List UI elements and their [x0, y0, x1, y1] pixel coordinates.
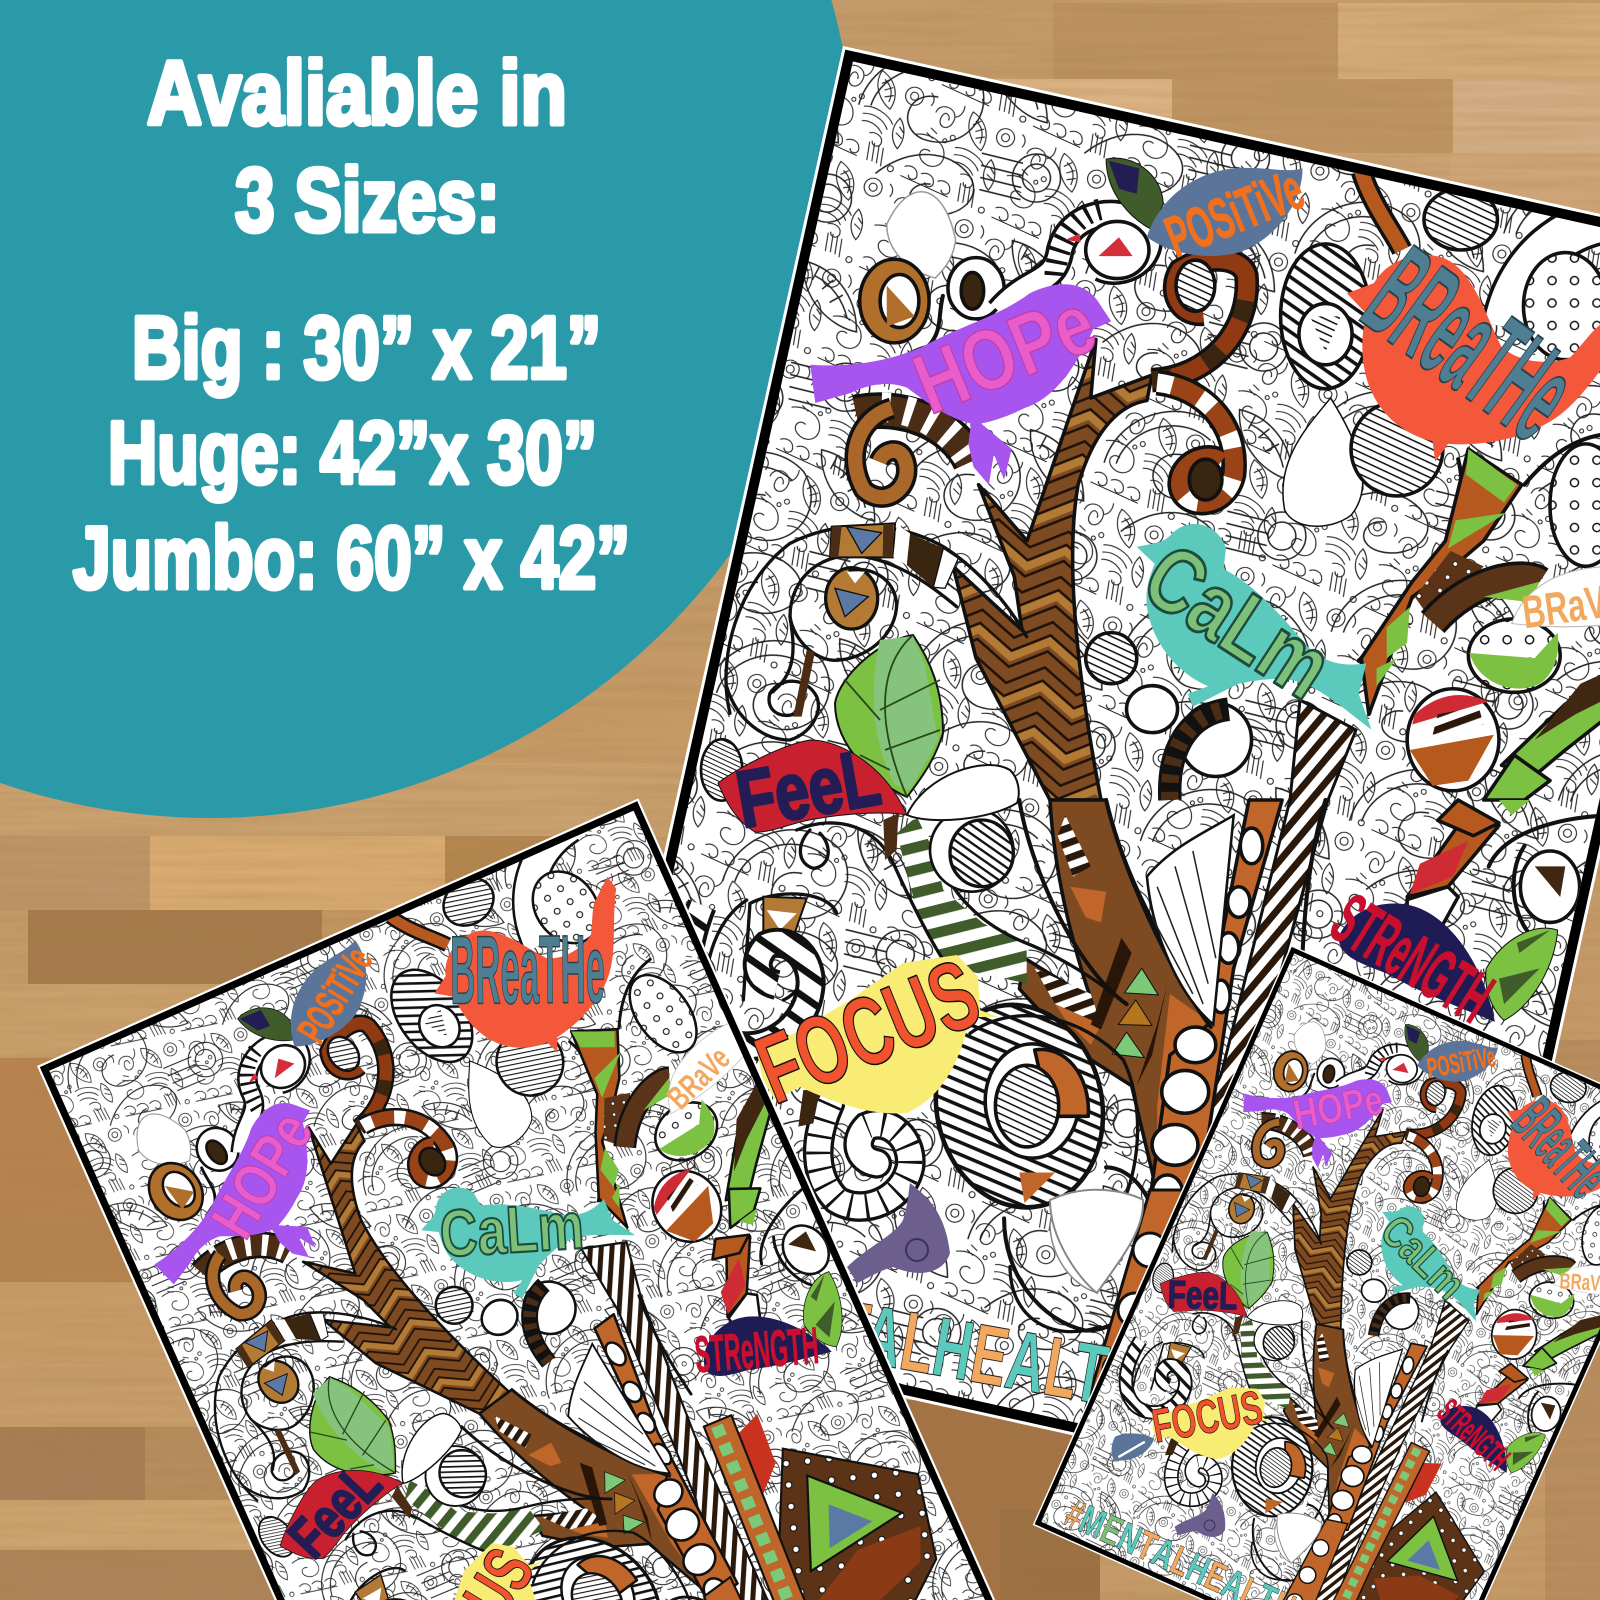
leaf word: strength: STReNGTH	[1430, 1392, 1517, 1478]
poster: jumbo, top right	[664, 46, 1600, 1436]
leaf word: positive: POSiTiVe	[1157, 157, 1313, 270]
size line: jumbo: Jumbo: 60” x 42”	[73, 508, 630, 607]
leaf word: feel: FeeL	[730, 732, 886, 845]
poster: big, bottom right	[1013, 918, 1600, 1600]
heading line 1: Avaliable in	[147, 44, 567, 144]
hashtag: mental health: #MENTALHEALTH	[681, 1256, 1152, 1429]
bird word: calm: CaLm	[1126, 525, 1349, 719]
poster: huge, bottom left	[37, 798, 996, 1600]
big left swirl band and dark green stripes	[701, 523, 1117, 1000]
lower swirl beside the spiral	[798, 1016, 1138, 1332]
leaf word: brave: BRaVe	[660, 1040, 738, 1117]
poster artwork copy	[37, 798, 996, 1600]
bird word: calm: CaLm	[438, 1189, 586, 1272]
leaf word: positive: POSiTiVe	[288, 939, 381, 1051]
upper tree artwork	[810, 158, 1600, 800]
heading line 2: 3 Sizes:	[235, 151, 500, 251]
bird word: hope: HOPe	[198, 1100, 327, 1250]
poster: huge, bottom left: BReaTHe	[450, 914, 605, 1025]
poster artwork	[560, 46, 1600, 1530]
size line: huge: Huge: 42”x 30”	[108, 403, 597, 502]
leaf word: feel: FeeL	[1167, 1273, 1238, 1318]
poster artwork copy	[1013, 918, 1600, 1600]
bird word: focus: FOCUS	[741, 937, 994, 1125]
lower tree artwork	[917, 800, 1600, 1331]
leaf word: feel: FeeL	[276, 1451, 394, 1570]
bird word: hope: HOPe	[901, 275, 1108, 433]
striped trunk band	[1115, 700, 1356, 1530]
size line: big: Big : 30” x 21”	[132, 298, 601, 397]
bird word: focus: FOCUS	[1148, 1381, 1267, 1454]
teal circle panel	[0, 0, 855, 818]
bird word: calm: CaLm	[1371, 1206, 1475, 1309]
lower-left swirl, lower bands and tree base	[687, 635, 1490, 1530]
leaf word: positive: POSiTiVe	[1424, 1040, 1498, 1084]
bird word: hope: HOPe	[1290, 1076, 1387, 1138]
title: sizes text block	[73, 44, 630, 607]
poster: huge, bottom left: STReNGTH	[693, 1316, 821, 1383]
